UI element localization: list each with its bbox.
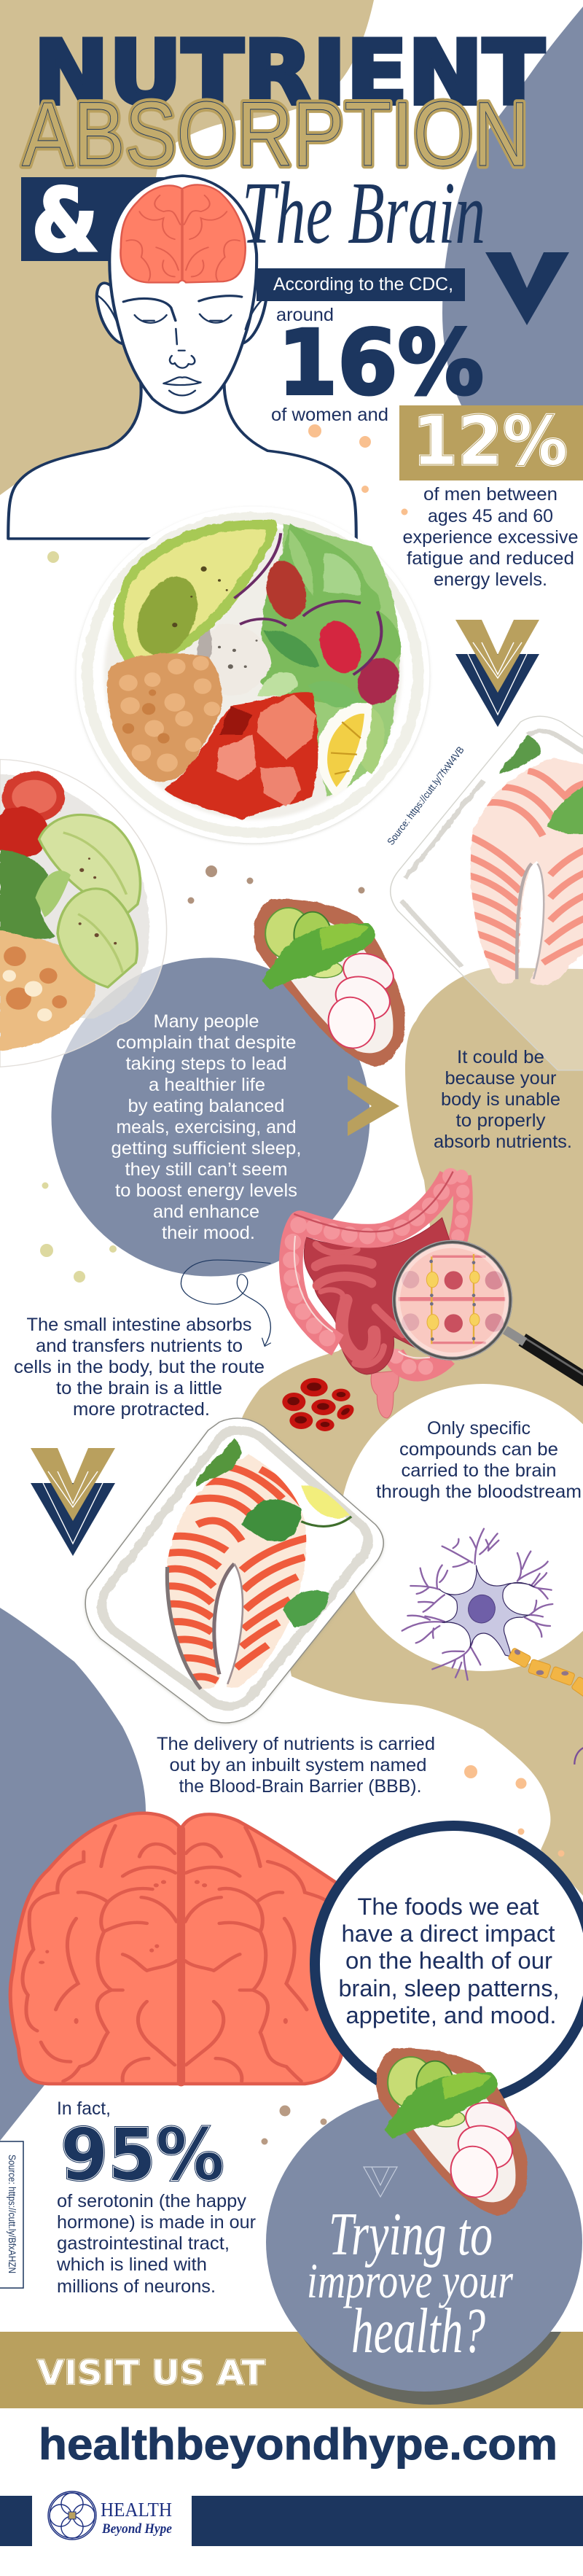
icon: outlined V	[364, 2167, 397, 2197]
decorative peach dots lower	[464, 1765, 564, 1856]
text: many people complaint	[111, 1011, 302, 1243]
logo: Health Beyond Hype	[48, 2491, 173, 2540]
text: men statistic: ages 45 and 60	[428, 506, 553, 526]
text: foods we eat: brain, sleep patterns,	[338, 1975, 560, 2001]
CDC label band: According to the CDC,	[273, 274, 453, 295]
title: NUTRIENT: NUTRIENT	[34, 22, 544, 125]
ampersand panel: &	[32, 170, 98, 271]
text: delivery of nutrients	[157, 1734, 435, 1797]
text: delivery of nutrients: the Blood-Brain Barrier (BBB).	[179, 1776, 421, 1797]
text: of women and: of women and	[271, 405, 388, 425]
logo: Health Beyond Hype: HEALTH	[101, 2499, 172, 2521]
illustration: small brain in head	[120, 184, 246, 282]
decorative brown dots	[188, 865, 364, 904]
text: could be because	[434, 1047, 572, 1152]
text: men statistic: of men between	[423, 484, 557, 505]
text: in fact: In fact,	[57, 2098, 111, 2119]
text: many people complaint: taking steps to lead	[125, 1054, 287, 1074]
text: foods we eat: on the health of our	[345, 1947, 552, 1974]
decorative peach dots top	[308, 424, 408, 515]
emblem: gold and navy double V top	[455, 620, 539, 727]
decorative olive dot	[47, 551, 59, 563]
text: foods we eat: The foods we eat	[357, 1894, 539, 1920]
text: many people complaint: complain that despite	[117, 1032, 296, 1053]
source note rotated: Source: https://cutt.ly/7fxW4VB	[385, 744, 466, 847]
text: only specific compounds: compounds can be	[399, 1439, 558, 1460]
text: serotonin	[56, 2191, 256, 2297]
visit band	[0, 2332, 583, 2408]
background: blue-gray shape top-right	[442, 7, 583, 405]
text: could be because: It could be	[457, 1047, 544, 1067]
text: trying to improve your health: improve your	[307, 2253, 513, 2308]
illustration: neuron	[402, 1529, 583, 1764]
logo: Health Beyond Hype: Beyond Hype	[101, 2521, 173, 2537]
illustration: salmon plate centre	[85, 1418, 383, 1723]
footer bar right	[192, 2496, 583, 2546]
text: could be because: body is unable	[441, 1089, 560, 1110]
decorative brown dots lower	[261, 2106, 326, 2145]
text: could be because: absorb nutrients.	[434, 1132, 572, 1152]
illustration: intestines	[291, 1172, 463, 1418]
illustration: avocado toast plate left	[0, 759, 167, 1067]
text: foods we eat: appetite, and mood.	[345, 2002, 557, 2028]
emblem: gold and navy double V left	[31, 1448, 115, 1556]
illustration: red blood cells	[282, 1378, 356, 1431]
text: many people complaint: their mood.	[162, 1223, 255, 1243]
illustration: magnifying glass with cells	[393, 1240, 583, 1384]
panel: call-to-action circle	[266, 2093, 582, 2392]
text: many people complaint: to boost energy levels	[115, 1180, 297, 1201]
text: many people complaint: meals, exercising, and	[117, 1117, 296, 1137]
text: trying to improve your health: health?	[351, 2296, 485, 2367]
text: visit us at: VISIT US AT	[37, 2353, 266, 2392]
text: many people complaint: and enhance	[153, 1202, 259, 1222]
text: small intestine: The small intestine absorbs	[26, 1315, 252, 1335]
text: only specific compounds	[376, 1418, 582, 1502]
ampersand panel	[21, 170, 167, 271]
illustration: radish toast	[254, 899, 405, 1066]
text: delivery of nutrients: The delivery of nutrients is carried	[157, 1734, 435, 1754]
text: small intestine: to the brain is a little	[56, 1378, 222, 1398]
text: visit us at: VISIT US AT	[37, 2353, 266, 2392]
text: serotonin: millions of neurons.	[57, 2276, 216, 2297]
illustration: head and shoulders outline	[8, 176, 356, 539]
text: men statistic: fatigue and reduced	[407, 548, 574, 569]
text: foods we eat: have a direct impact	[341, 1921, 555, 1947]
text: small intestine	[14, 1315, 265, 1420]
text: many people complaint: by eating balanced	[128, 1096, 284, 1116]
text: many people complaint: a healthier life	[149, 1075, 265, 1095]
CDC label band	[257, 268, 465, 301]
text: small intestine: cells in the body, but the route	[14, 1357, 265, 1377]
circle shadow on band	[303, 2332, 561, 2405]
footer bar left	[0, 2496, 32, 2546]
panel: navy ring circle	[315, 1826, 583, 2103]
website url: healthbeyondhype.com	[39, 2420, 557, 2469]
text: small intestine: more protracted.	[73, 1399, 210, 1420]
text: serotonin: which is lined with	[56, 2254, 207, 2275]
background: tan shape top-left	[0, 0, 374, 495]
illustration: salad bowl plate	[77, 507, 429, 843]
stat panel: 12%: 12%	[412, 402, 568, 480]
text: many people complaint: getting sufficient sleep,	[111, 1138, 302, 1159]
text: trying to improve your health: Trying to	[329, 2201, 493, 2268]
arrow: curly line to intestine text	[181, 1260, 270, 1346]
text: trying to improve your health	[307, 2201, 513, 2367]
text: men statistic: energy levels.	[434, 569, 547, 590]
background: blue-gray shape bottom-left	[0, 1608, 168, 2141]
text: men statistic	[402, 484, 579, 590]
text: could be because: to properly	[456, 1110, 546, 1131]
illustration: large brain	[10, 1813, 345, 2084]
panel: white circle	[340, 1384, 583, 1671]
text: around: around	[276, 305, 334, 325]
stat: 95%: 95%	[60, 2114, 224, 2197]
stat panel: 12%: 12%	[412, 402, 568, 480]
text: many people complaint: they still can’t seem	[125, 1159, 287, 1180]
illustration: salmon plate right	[391, 716, 583, 1070]
icon: navy V	[485, 252, 569, 325]
arrow: gold chevron	[348, 1075, 399, 1136]
text: foods we eat	[338, 1894, 560, 2028]
source note box: Source: https://cutt.ly/BfxAHZN	[7, 2155, 17, 2273]
text: only specific compounds: Only specific	[427, 1418, 531, 1439]
stat: 95%: 95%	[60, 2114, 224, 2197]
source note box	[0, 2141, 23, 2288]
text: many people complaint: Many people	[153, 1011, 259, 1032]
text: men statistic: experience excessive	[402, 527, 579, 548]
text: serotonin: hormone) is made in our	[57, 2212, 256, 2233]
text: delivery of nutrients: out by an inbuilt system named	[169, 1755, 427, 1775]
text: only specific compounds: carried to the brain	[401, 1460, 557, 1481]
illustration: radish toast lower	[376, 2048, 528, 2215]
stat: 16%: 16%	[278, 311, 484, 415]
text: serotonin: of serotonin (the happy	[57, 2191, 246, 2211]
text: serotonin: gastrointestinal tract,	[57, 2233, 230, 2254]
text: only specific compounds: through the bloodstream	[376, 1482, 582, 1502]
panel: blue circle	[51, 958, 370, 1276]
background: tan blob middle right	[242, 968, 583, 1896]
decorative olive dots	[40, 1183, 117, 1283]
text: small intestine: and transfers nutrients to	[36, 1336, 243, 1356]
text: could be because: because your	[445, 1068, 557, 1089]
